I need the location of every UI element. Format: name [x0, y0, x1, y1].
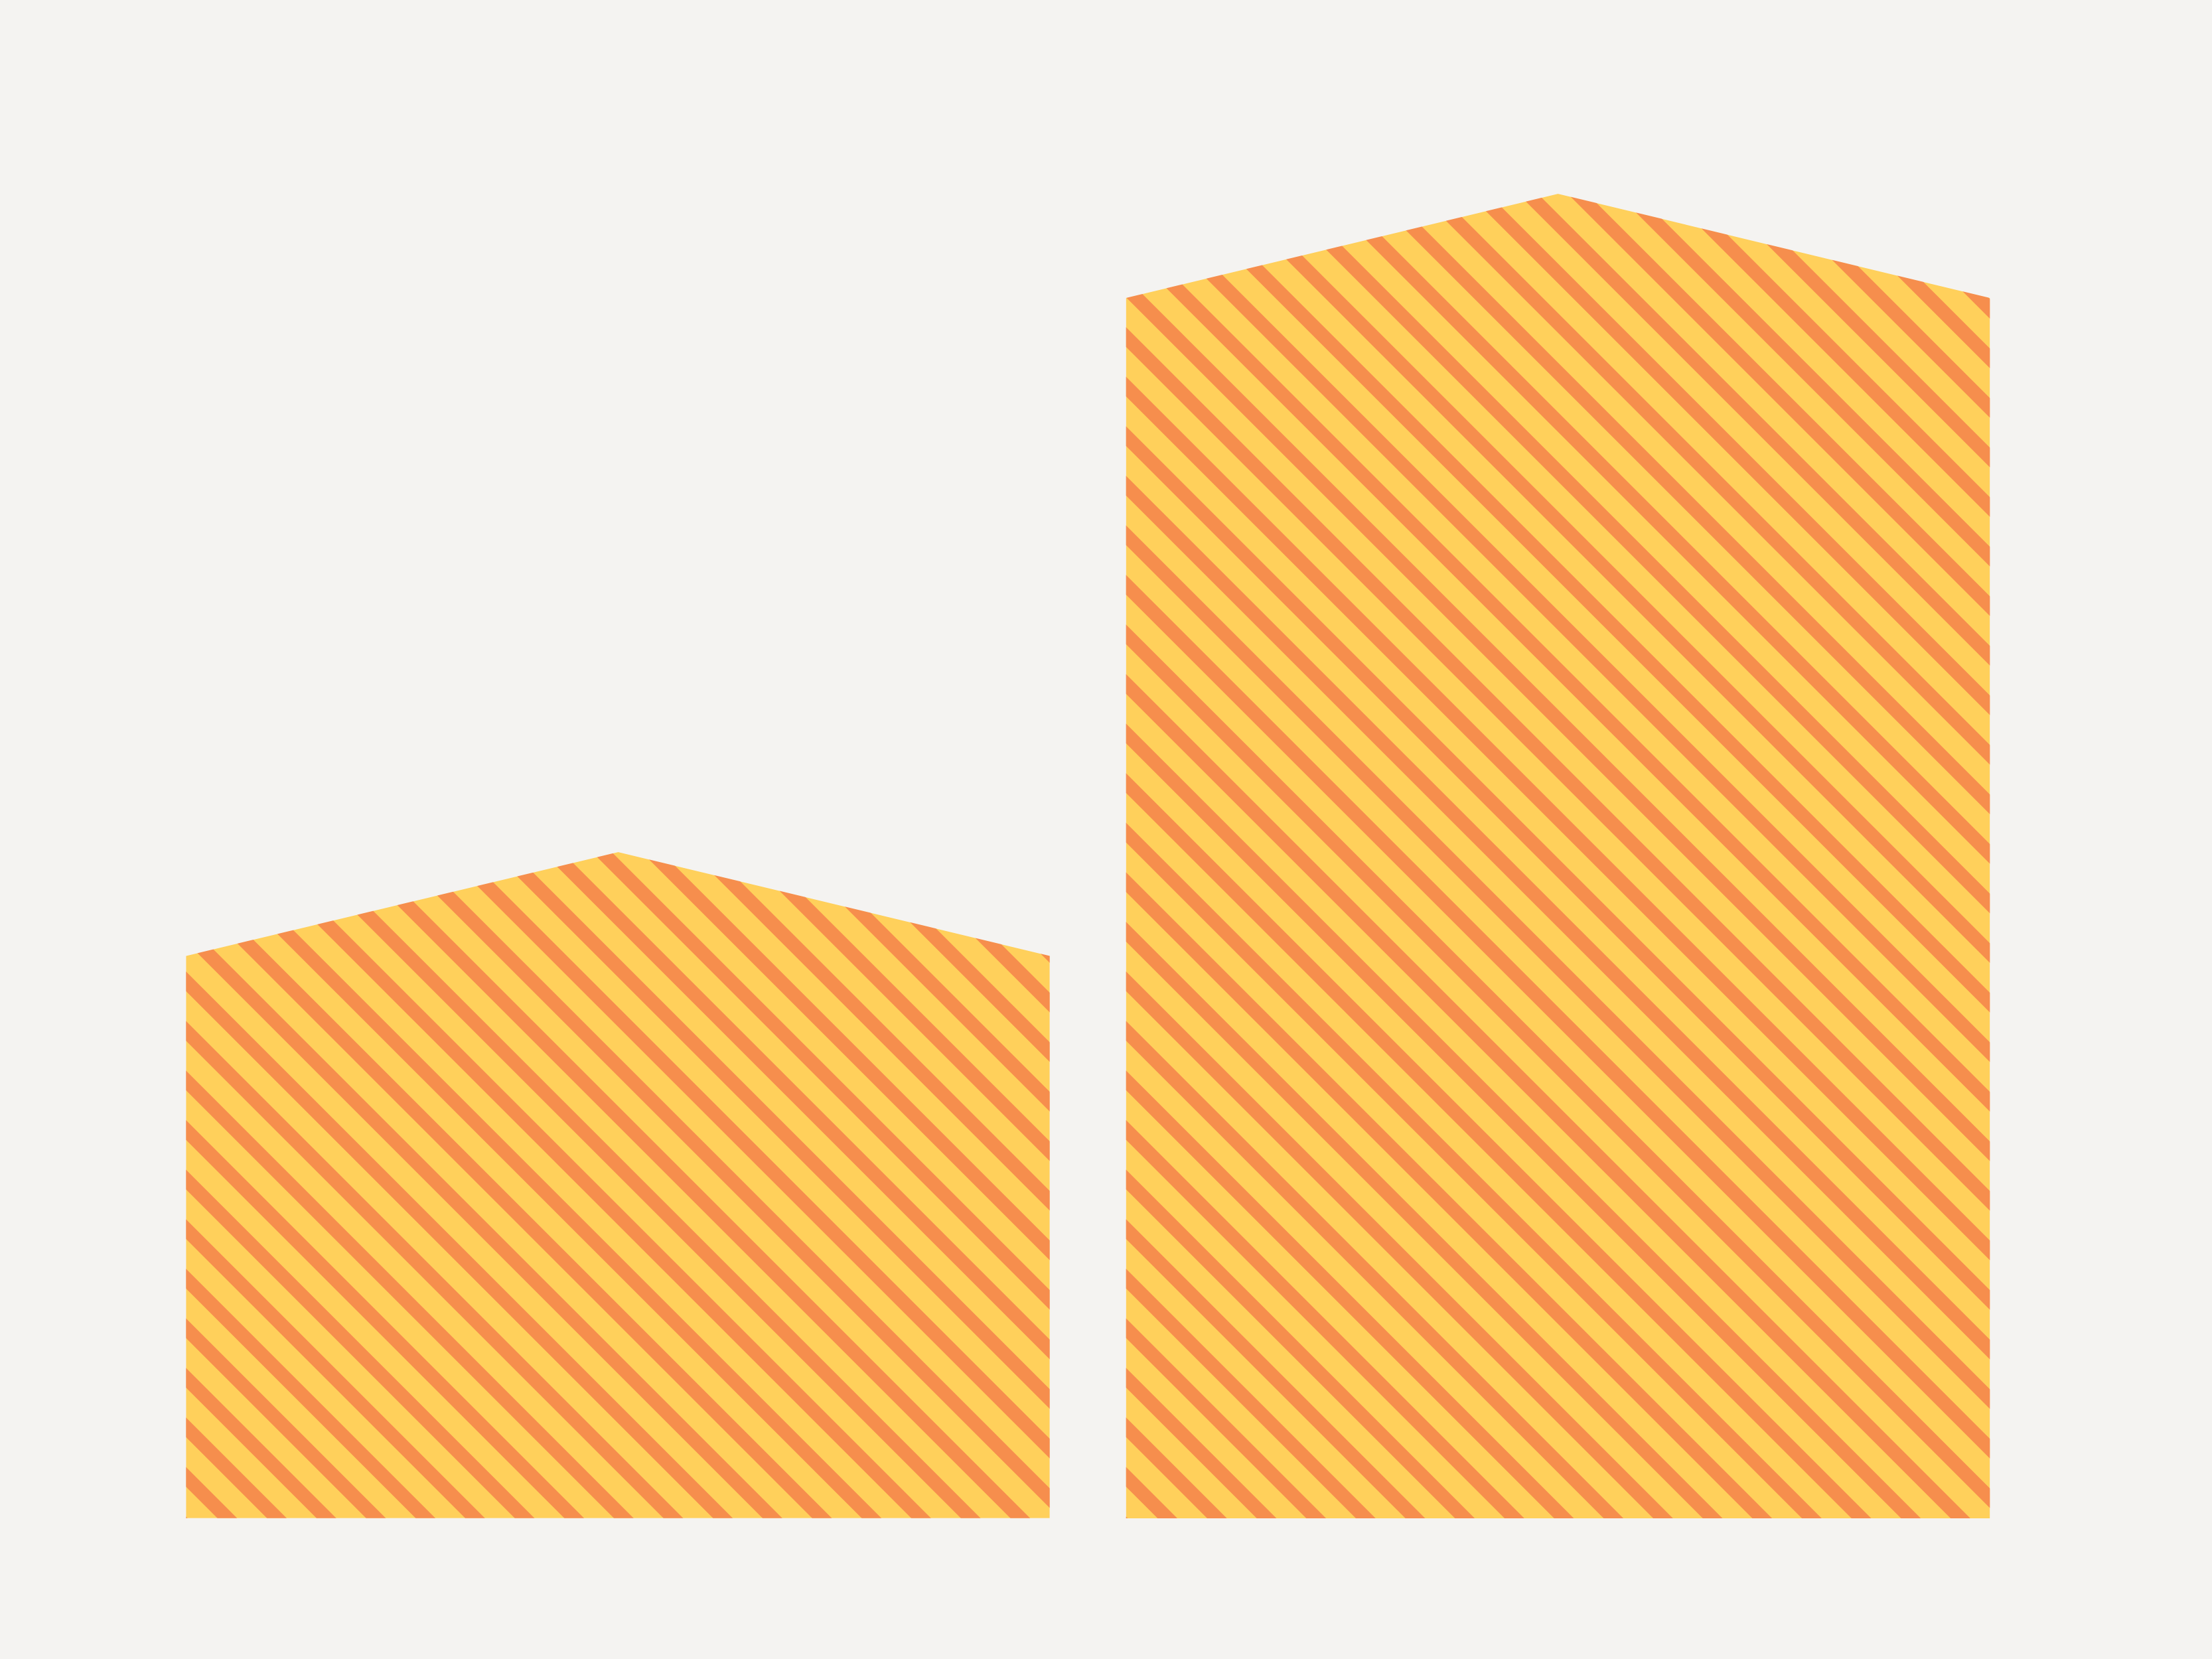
bar: short striped house shape (left) — [186, 852, 1050, 1518]
bar: tall striped house shape (right) — [1126, 194, 1990, 1518]
chart: two striped house-shaped bars — [186, 194, 1990, 1518]
